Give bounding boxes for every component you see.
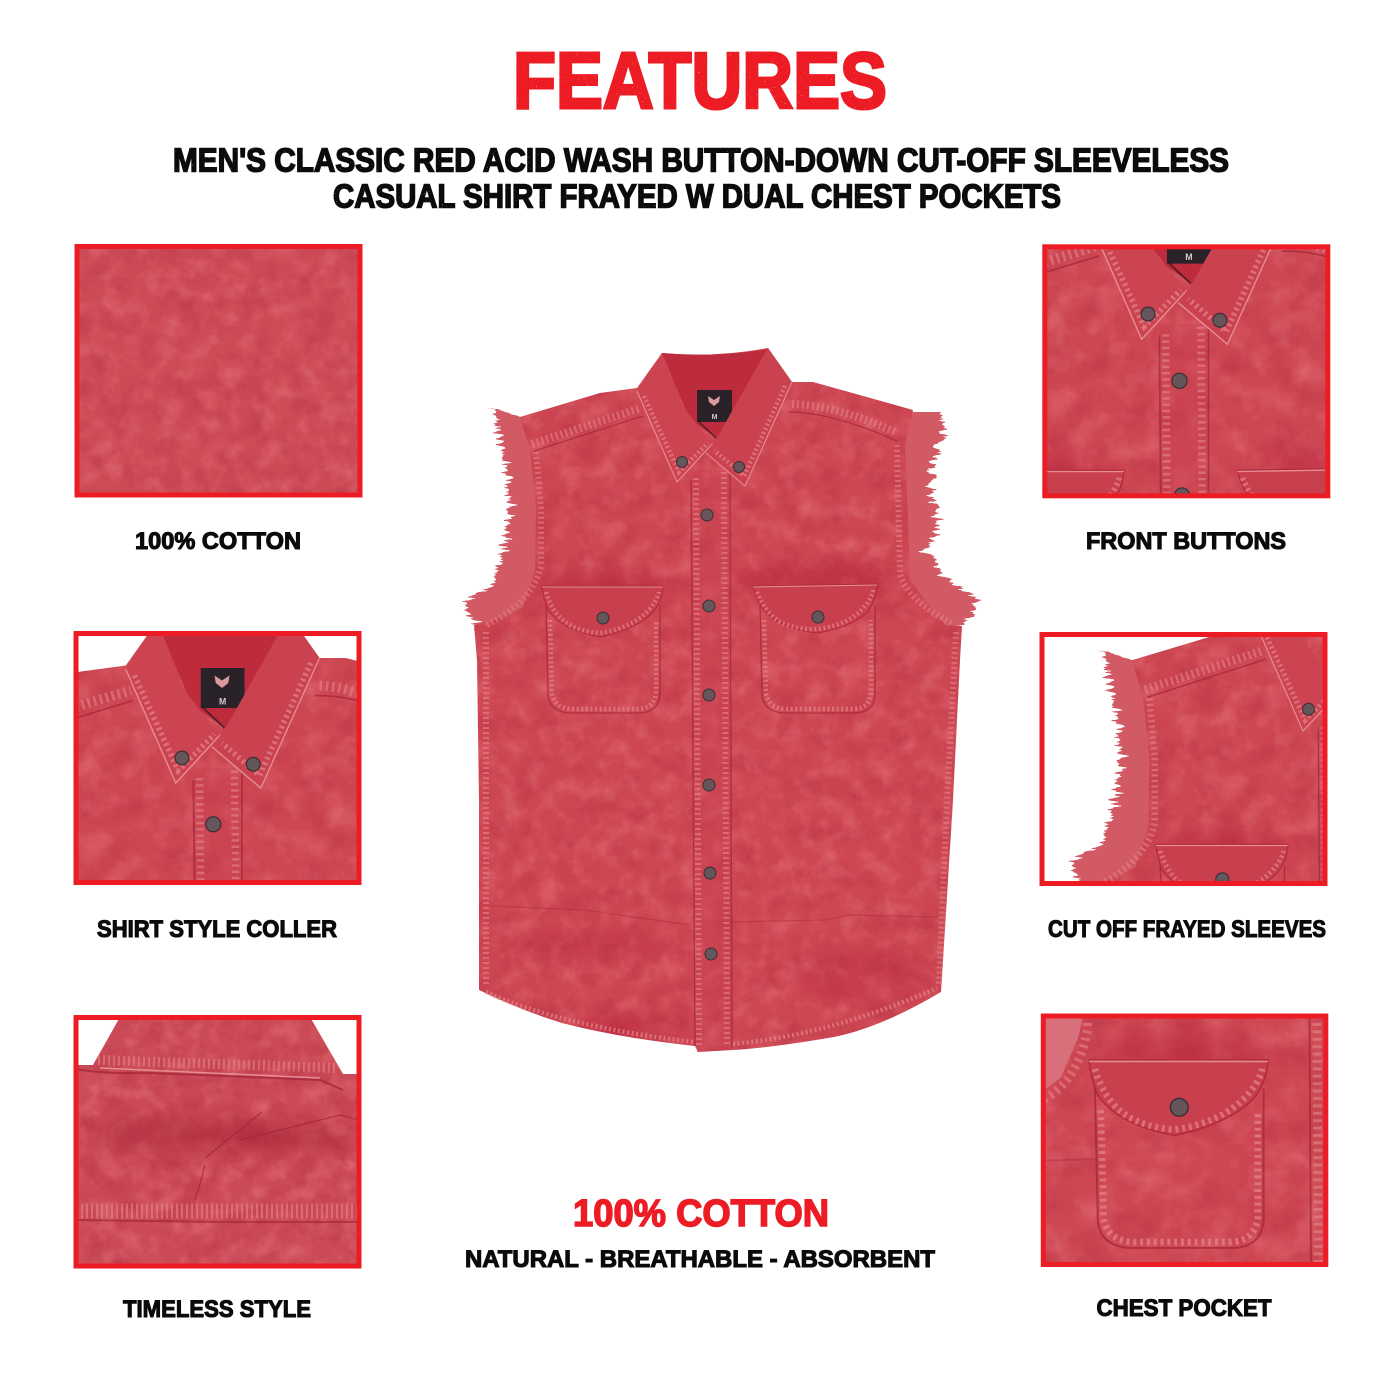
caption: shirt style collar: SHIRT STYLE COLLER — [97, 916, 337, 943]
caption: chest pocket: CHEST POCKET — [1096, 1295, 1272, 1322]
subtitle: CASUAL SHIRT FRAYED W DUAL CHEST POCKETS — [333, 178, 1061, 214]
panel: chest pocket — [1043, 1016, 1326, 1264]
yoke and armhole seams — [486, 404, 956, 1044]
panel: timeless style — [76, 1017, 359, 1266]
right pocket — [753, 584, 877, 713]
caption: cut off frayed sleeves: CUT OFF FRAYED SLEEVES — [1048, 916, 1326, 943]
panel: 100% cotton fabric — [77, 246, 360, 495]
subtitle: MEN'S CLASSIC RED ACID WASH BUTTON-DOWN CUT-OFF SLEEVELESS — [173, 142, 1229, 178]
left pocket — [542, 586, 663, 713]
buttons — [676, 456, 744, 960]
panel: front buttons — [1042, 244, 1330, 498]
shirt illustration — [460, 340, 990, 1060]
callout: natural breathable absorbent: NATURAL - BREATHABLE - ABSORBENT — [465, 1246, 935, 1273]
frayed armhole fringes — [464, 408, 981, 632]
placket — [691, 470, 732, 1052]
callout: 100% cotton: 100% COTTON — [573, 1193, 829, 1235]
caption: front buttons: FRONT BUTTONS — [1086, 528, 1286, 555]
panel: shirt style collar — [76, 616, 361, 884]
collar with label — [637, 348, 792, 486]
collar with label: M — [712, 414, 718, 421]
shirt body — [460, 340, 990, 1060]
caption: 100% cotton: 100% COTTON — [135, 528, 301, 555]
panel: cut off frayed sleeves — [1040, 632, 1328, 886]
caption: timeless style: TIMELESS STYLE — [123, 1296, 311, 1323]
subtitle — [173, 142, 1229, 214]
title: FEATURES — [513, 36, 887, 125]
